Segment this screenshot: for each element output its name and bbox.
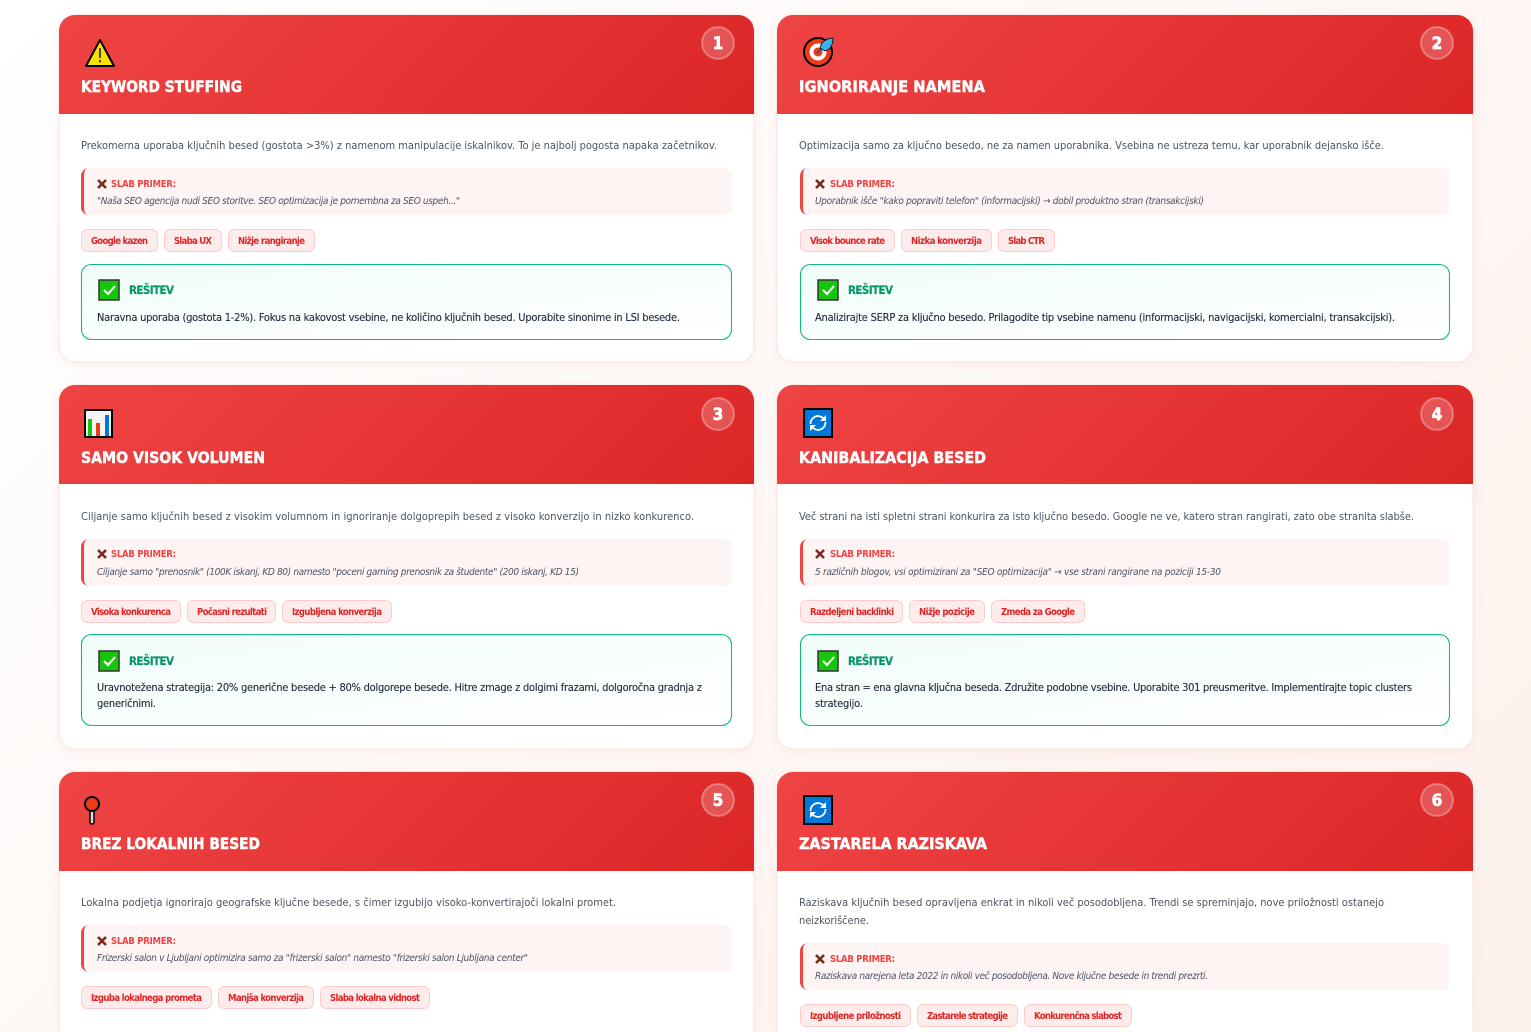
bad example 3: [81, 539, 732, 586]
bad example 2: SLAB PRIMER:: [830, 179, 895, 190]
number badge 3: 3: [713, 405, 723, 425]
icon: bar chart: [85, 410, 112, 437]
number badge 2: [1421, 27, 1453, 59]
number badge 5: [702, 784, 734, 816]
solution 1: Naravna uporaba (gostota 1-2%). Fokus na kakovost vsebine, ne količino ključnih besed. Uporabite sinonime in LSI besede.: [97, 311, 680, 324]
consequence tags 4: Razdeljeni backlinki: [810, 607, 894, 618]
consequence tags 1: [82, 230, 314, 252]
number badge 1: 1: [713, 34, 723, 54]
consequence tags 6: Izgubljene priložnosti: [810, 1011, 901, 1022]
header 2: [777, 15, 1473, 114]
consequence tags 1: Nižje rangiranje: [238, 236, 305, 247]
solution 4: strategijo.: [815, 697, 863, 710]
number badge 4: 4: [1432, 405, 1442, 425]
solution 4: REŠITEV: [848, 653, 893, 668]
bad example 3: SLAB PRIMER:: [111, 549, 176, 560]
solution 3: [82, 634, 732, 726]
icon: round pushpin: [85, 797, 99, 824]
description 6: [799, 896, 1384, 927]
consequence tags 1: Slaba UX: [174, 236, 212, 247]
number badge 1: [702, 27, 734, 59]
number badge 6: 6: [1432, 791, 1442, 811]
title 6: ZASTARELA RAZISKAVA: [799, 834, 988, 853]
bad example 4: SLAB PRIMER:: [830, 549, 895, 560]
consequence tags 2: Slab CTR: [1008, 236, 1045, 247]
consequence tags 4: Nižje pozicije: [919, 607, 975, 618]
title 3: SAMO VISOK VOLUMEN: [81, 448, 265, 467]
description 5: Lokalna podjetja ignorirajo geografske ključne besede, s čimer izgubijo visoko-konvertirajoči lokalni promet.: [81, 896, 616, 909]
bad example 1: SLAB PRIMER:: [111, 179, 176, 190]
icon: target with dart: [804, 38, 833, 66]
panel: ignoriranje namena: [777, 15, 1473, 362]
consequence tags 5: Slaba lokalna vidnost: [330, 993, 420, 1004]
consequence tags 4: Zmeda za Google: [1001, 607, 1075, 618]
header 4: [777, 385, 1473, 484]
consequence tags 2: Visok bounce rate: [810, 236, 885, 247]
bad example 6: Raziskava narejena leta 2022 in nikoli več posodobljena. Nove ključne besede in trendi prezrti.: [815, 970, 1208, 982]
bad example 5: [81, 925, 732, 972]
description 2: Optimizacija samo za ključno besedo, ne za namen uporabnika. Vsebina ne ustreza temu, kar uporabnik dejansko išče.: [799, 139, 1384, 152]
title 4: KANIBALIZACIJA BESED: [799, 448, 986, 467]
icon: warning triangle: [86, 40, 114, 66]
solution 2: [800, 264, 1450, 340]
solution 4: [800, 634, 1450, 726]
bad example 4: [800, 539, 1450, 586]
title 2: IGNORIRANJE NAMENA: [799, 77, 986, 96]
solution 2: REŠITEV: [848, 282, 893, 297]
bad example 5: SLAB PRIMER:: [111, 936, 176, 947]
consequence tags 6: [800, 1004, 1132, 1026]
solution 3: REŠITEV: [129, 653, 174, 668]
solution 3: Uravnotežena strategija: 20% generične besede + 80% dolgorepe besede. Hitre zmage z dolgimi frazami, dolgoročna gradnja z: [97, 681, 702, 694]
consequence tags 6: Konkurenčna slabost: [1034, 1011, 1122, 1022]
number badge 6: [1421, 784, 1453, 816]
bad example 5: Frizerski salon v Ljubljani optimizira samo za "frizerski salon" namesto "frizerski salon Ljubljana center": [97, 953, 528, 964]
description 3: Ciljanje samo ključnih besed z visokim volumnom in ignoriranje dolgoprepih besed z visoko konverzijo in nizko konkurenco.: [81, 510, 694, 523]
header 6: [777, 772, 1473, 871]
bad example 6: SLAB PRIMER:: [830, 954, 895, 965]
consequence tags 5: Izguba lokalnega prometa: [91, 993, 202, 1004]
consequence tags 3: Visoka konkurenca: [91, 607, 171, 618]
panel: samo visok volumen: [59, 385, 754, 749]
number badge 4: [1421, 398, 1453, 430]
consequence tags 1: Google kazen: [91, 236, 148, 247]
consequence tags 3: Izgubljena konverzija: [292, 607, 382, 618]
solution 4: Ena stran = ena glavna ključna beseda. Združite podobne vsebine. Uporabite 301 preusmeritve. Implementirajte topic clusters: [815, 681, 1412, 694]
panel: brez lokalnih besed: [59, 772, 754, 1032]
solution 3: generičnimi.: [97, 697, 156, 710]
consequence tags 2: [800, 230, 1054, 252]
description 4: Več strani na isti spletni strani konkurira za isto ključno besedo. Google ne ve, katero stran rangirati, zato obe stranita slabše.: [799, 510, 1414, 523]
description 6: Raziskava ključnih besed opravljena enkrat in nikoli več posodobljena. Trendi se spreminjajo, nove priložnosti ostanejo: [799, 896, 1384, 909]
header 3: [59, 385, 754, 484]
number badge 5: 5: [713, 791, 723, 811]
number badge 2: 2: [1432, 34, 1442, 54]
title 1: KEYWORD STUFFING: [81, 77, 242, 96]
description 1: Prekomerna uporaba ključnih besed (gostota >3%) z namenom manipulacije iskalnikov. To je najbolj pogosta napaka začetnikov.: [81, 139, 717, 152]
consequence tags 3: Počasni rezultati: [197, 607, 267, 618]
bad example 1: [81, 168, 732, 215]
bad example 3: Ciljanje samo "prenosnik" (100K iskanj, KD 80) namesto "poceni gaming prenosnik za študente" (200 iskanj, KD 15): [97, 566, 579, 578]
consequence tags 2: Nizka konverzija: [911, 236, 982, 247]
bad example 1: "Naša SEO agencija nudi SEO storitve. SEO optimizacija je pomembna za SEO uspeh...": [97, 195, 460, 207]
number badge 3: [702, 398, 734, 430]
description 6: neizkoriščene.: [799, 914, 869, 927]
consequence tags 6: Zastarele strategije: [927, 1011, 1008, 1022]
bad example 2: Uporabnik išče "kako popraviti telefon" (informacijski) → dobil produktno stran (transakcijski): [815, 195, 1204, 207]
consequence tags 4: [800, 600, 1084, 622]
title 5: BREZ LOKALNIH BESED: [81, 834, 260, 853]
consequence tags 5: Manjša konverzija: [228, 993, 304, 1004]
bad example 6: [800, 943, 1450, 990]
header 5: [59, 772, 754, 871]
bad example 4: 5 različnih blogov, vsi optimizirani za "SEO optimizacija" → vse strani rangirane na poziciji 15-30: [815, 566, 1221, 578]
icon: refresh: [804, 409, 832, 437]
panel: kanibalizacija besed: [777, 385, 1473, 749]
header 1: [59, 15, 754, 114]
solution 2: Analizirajte SERP za ključno besedo. Prilagodite tip vsebine namenu (informacijski, navigacijski, komercialni, transakcijski).: [815, 311, 1395, 324]
panel: zastarela raziskava: [777, 772, 1473, 1032]
bad example 2: [800, 168, 1450, 215]
solution 1: REŠITEV: [129, 282, 174, 297]
panel: keyword stuffing: [59, 15, 754, 362]
consequence tags 3: [82, 600, 392, 622]
solution 1: [82, 264, 732, 340]
consequence tags 5: [82, 986, 430, 1008]
icon: refresh: [804, 796, 832, 824]
